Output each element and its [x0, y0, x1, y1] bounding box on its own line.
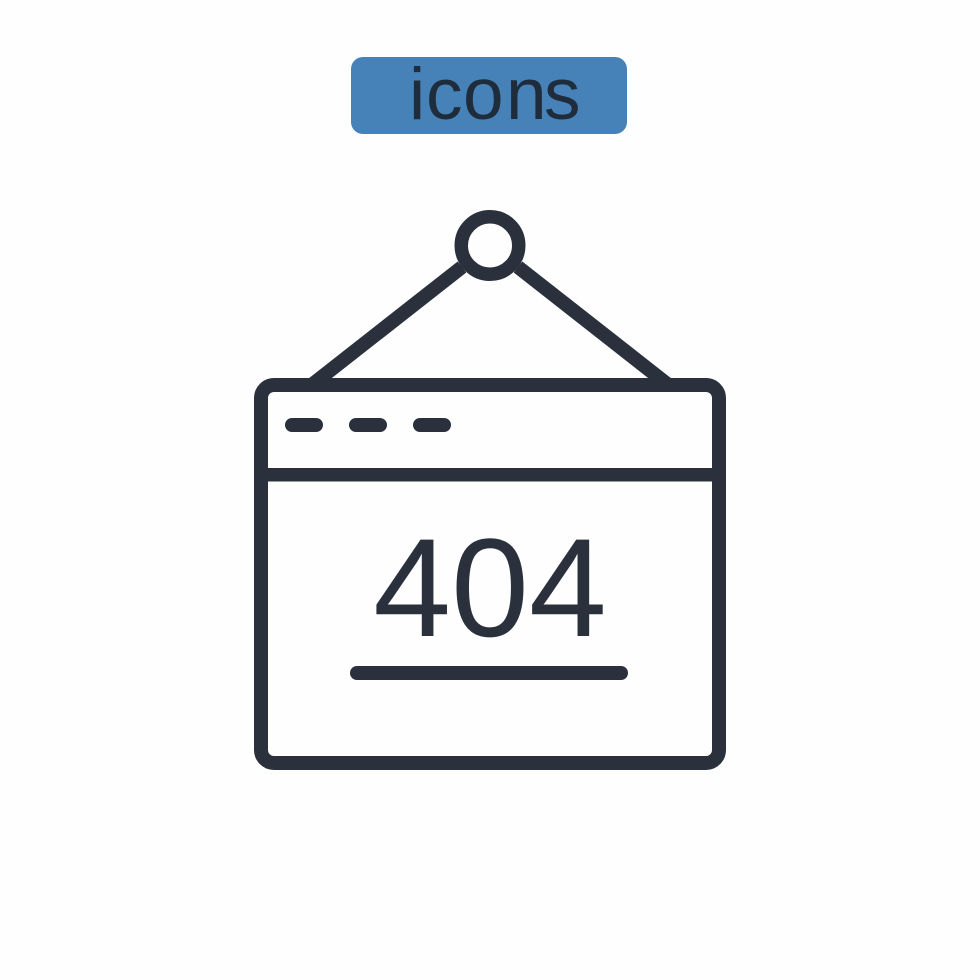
error code 404: 404 — [373, 509, 607, 666]
window control dashes — [285, 418, 451, 432]
icon: hanging 404 sign — [261, 217, 719, 763]
badge text: icons — [409, 54, 580, 135]
underline bar — [350, 666, 628, 680]
badge: icons label — [351, 54, 627, 135]
hanging cord — [312, 267, 668, 385]
browser window frame — [261, 385, 719, 763]
window title bar divider — [261, 468, 719, 482]
hanging nail ring — [461, 217, 519, 274]
